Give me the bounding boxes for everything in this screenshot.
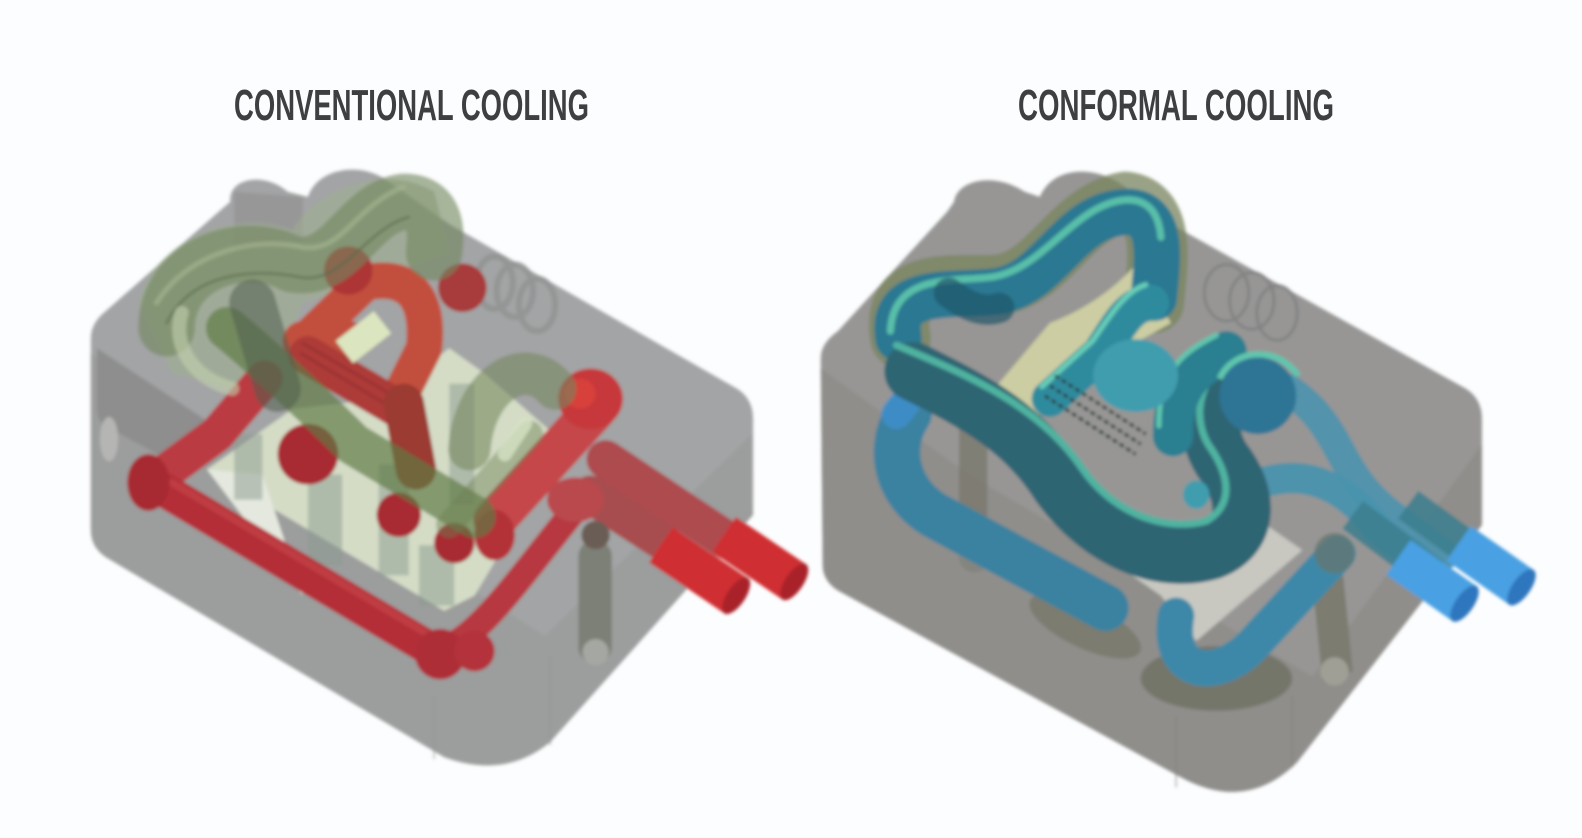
green translucent part: conventional bbox=[156, 187, 555, 525]
blue cooling channels: conformal bbox=[896, 389, 1464, 668]
window in red ring bbox=[336, 311, 391, 363]
diagram: conformal cooling mold bbox=[821, 172, 1541, 792]
red pipe caps bbox=[127, 246, 623, 679]
coils top right bbox=[1204, 264, 1297, 340]
outlet pipes: conventional bbox=[649, 517, 814, 618]
title: conventional cooling: CONVENTIONAL COOLING bbox=[234, 81, 589, 130]
title: conformal cooling: CONFORMAL COOLING bbox=[1018, 81, 1334, 130]
yellow core visible in loop bbox=[994, 264, 1171, 424]
ejector pin bbox=[1312, 570, 1353, 681]
ejector pin bbox=[578, 540, 612, 663]
olive halo around conformal channel bbox=[899, 202, 1157, 338]
vertical bars in the mold cavity bbox=[234, 384, 474, 606]
blue pipe ends bbox=[1314, 526, 1541, 626]
grey rear lugs bbox=[234, 192, 303, 252]
mold block: conventional bbox=[91, 170, 753, 765]
pale green core: conventional bbox=[139, 179, 449, 394]
coils top right bbox=[476, 256, 555, 331]
mold block: conformal bbox=[821, 172, 1482, 792]
teal conformal channel bbox=[890, 200, 1242, 555]
dark ejector hole detail bbox=[1045, 376, 1146, 454]
diagram: conventional cooling mold bbox=[91, 170, 814, 765]
red cooling channels: conventional bbox=[151, 281, 727, 654]
inner teal blobs bbox=[1093, 339, 1298, 509]
